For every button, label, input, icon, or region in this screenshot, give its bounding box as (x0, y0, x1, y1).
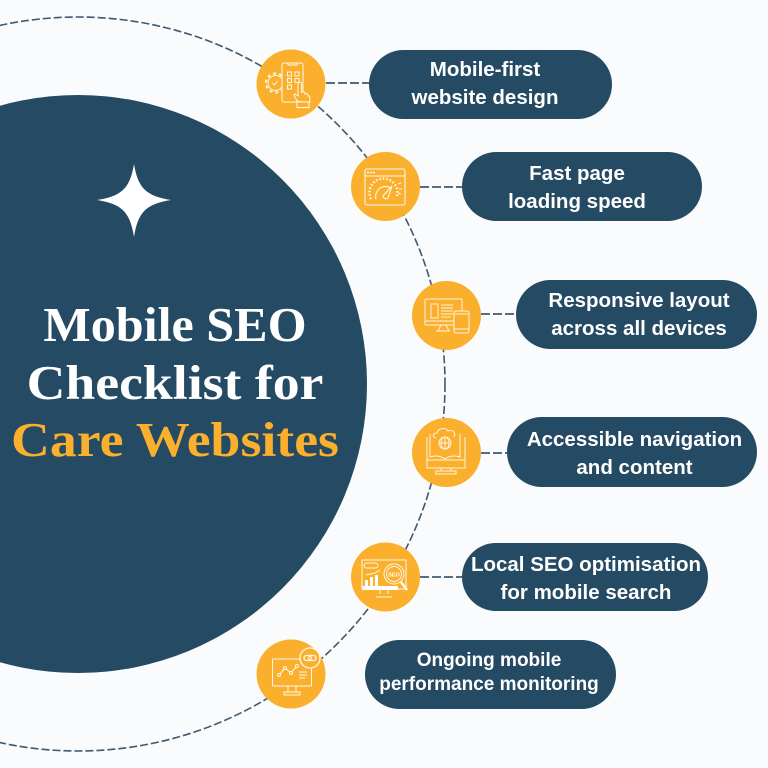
icon: local SEO monitor: SEO (388, 572, 401, 578)
icon: accessible content globe (412, 418, 481, 487)
pill text: responsive: Responsive layout (548, 289, 730, 312)
pill text: mobile-first: website design (412, 86, 558, 109)
pill: mobile-first (369, 50, 612, 119)
pill text: ongoing (379, 650, 599, 695)
pill: accessible (507, 417, 757, 487)
icon: performance monitoring (256, 640, 326, 708)
icon: four-point sparkle (97, 164, 171, 237)
title: Checklist for (27, 354, 323, 410)
icon: local SEO monitor (351, 542, 420, 612)
pill text: accessible (527, 428, 742, 479)
pill: fast page (462, 152, 702, 221)
pill text: responsive: across all devices (551, 317, 727, 340)
dashed connectors (326, 83, 516, 577)
icon: mobile-first design (256, 50, 326, 118)
dark main circle (0, 95, 367, 673)
pill text: fast page: loading speed (508, 190, 646, 213)
pill text: local SEO (471, 553, 701, 604)
pill text: ongoing: Ongoing mobile (417, 650, 561, 671)
pill text: fast page (508, 162, 646, 213)
pill text: local SEO: Local SEO optimisation (471, 553, 701, 576)
pill text: accessible: Accessible navigation (527, 428, 742, 451)
title: Care Websites (11, 412, 339, 467)
dashed arc (0, 17, 445, 751)
pill text: mobile-first: Mobile-first (430, 58, 540, 81)
pill text: fast page: Fast page (529, 162, 625, 185)
pill text: accessible: and content (576, 456, 693, 479)
icon: speed gauge browser (351, 152, 420, 221)
title (11, 297, 339, 467)
pill: responsive (516, 280, 757, 349)
pill text: mobile-first (411, 58, 558, 109)
pill text: responsive (548, 289, 730, 340)
icon: responsive devices (412, 281, 481, 350)
pill text: local SEO: for mobile search (501, 581, 671, 604)
pill: ongoing (365, 640, 616, 709)
title: Mobile SEO (43, 297, 307, 352)
pill: local SEO (462, 543, 708, 611)
pill text: ongoing: performance monitoring (379, 674, 599, 695)
